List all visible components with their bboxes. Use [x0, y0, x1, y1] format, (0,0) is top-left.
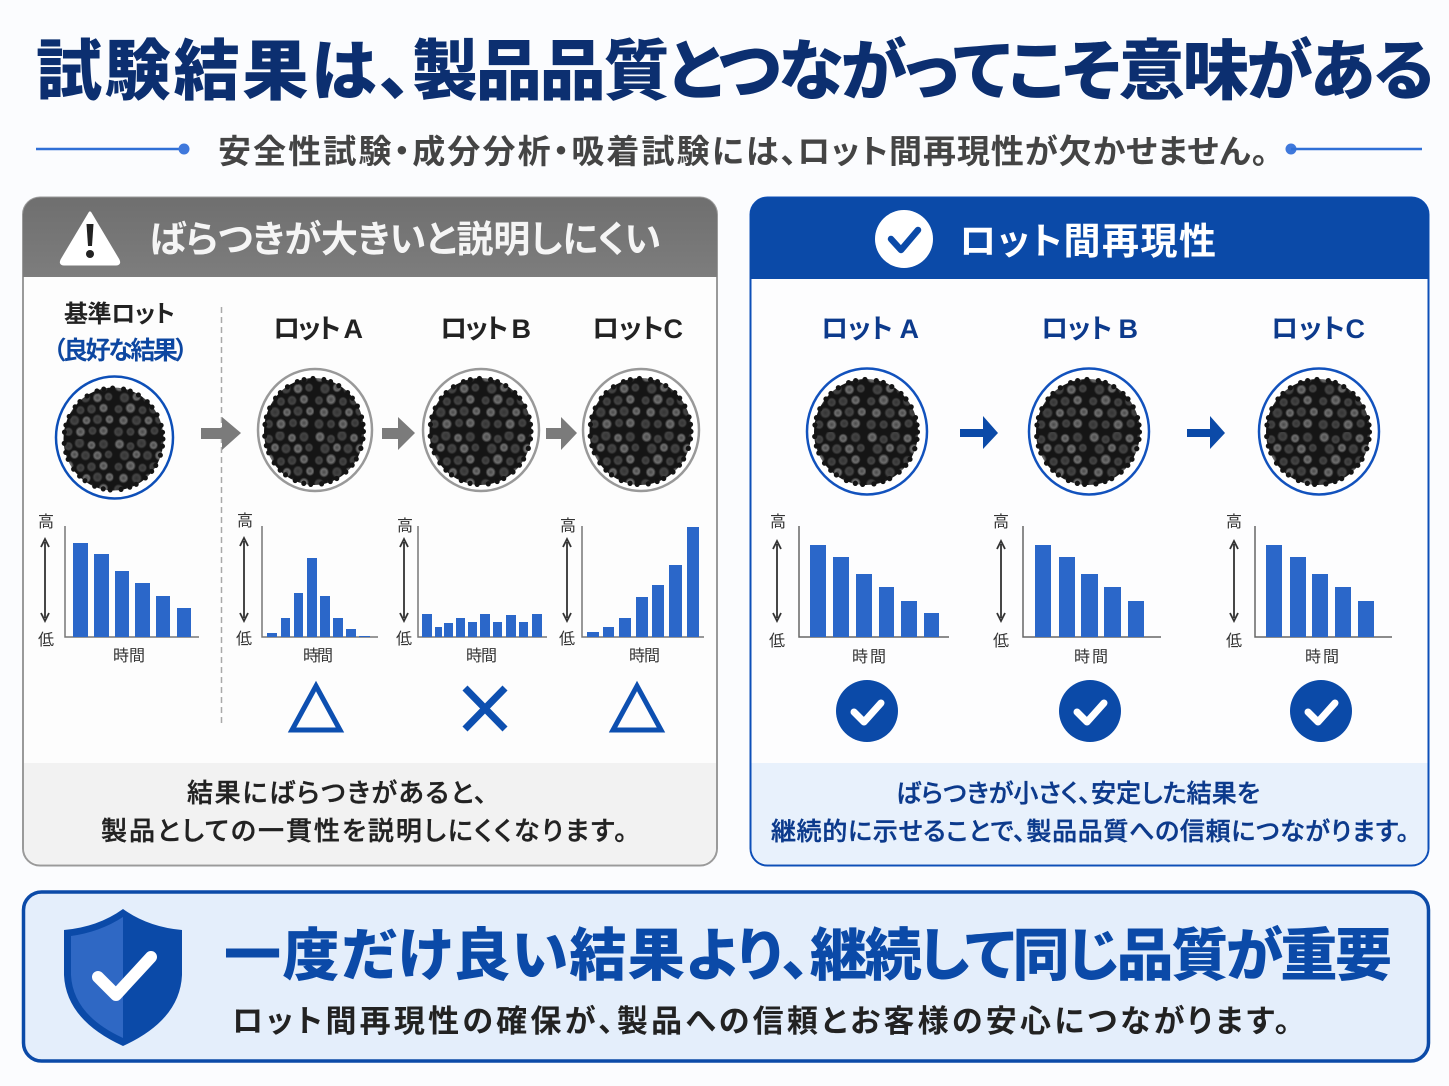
bar chart: lot A: 高: [237, 512, 253, 530]
verdict: check: [1290, 680, 1352, 742]
reference lot column: [38, 301, 199, 665]
panel heading: ロット間再現性: [959, 221, 1216, 262]
bar chart: reference: 時間: [113, 647, 145, 665]
bar chart: lot B: 高: [397, 517, 413, 535]
banner heading: [224, 924, 1392, 988]
bar chart: lot C: 時間: [629, 647, 660, 665]
sample dish: [583, 369, 699, 491]
sample dish: [1259, 368, 1379, 494]
icon: shield with check: [64, 909, 182, 1046]
bar chart: lot A: 低: [769, 632, 785, 650]
verdict: check: [836, 680, 898, 742]
bar chart: lot C: 時間: [1305, 648, 1339, 666]
bar chart: lot A: 低: [236, 630, 252, 648]
lot label: ロット A: [821, 314, 919, 344]
panel: large variation: [23, 198, 717, 866]
lot A column: [236, 314, 378, 730]
verdict: cross: [465, 688, 505, 729]
panel footer: blue: ばらつきが小さく、安定した結果を: [896, 780, 1260, 808]
panel header: gray: [23, 198, 717, 277]
bar chart: lot B: 高: [993, 513, 1009, 531]
panel footer: gray: [24, 763, 716, 864]
arrow: [960, 416, 998, 449]
bar chart: lot C: 高: [560, 517, 576, 535]
bar chart: reference: [38, 513, 199, 665]
lot C column: [1226, 314, 1392, 742]
sample dish: [1029, 368, 1149, 494]
arrow: [546, 417, 577, 450]
lot C column: [559, 314, 704, 730]
bar chart: reference: 低: [38, 631, 54, 649]
bar chart: lot B: 時間: [466, 647, 497, 665]
arrow: [1187, 416, 1225, 449]
banner text: ロット間再現性の確保が、製品への信頼とお客様の安心につながります。: [232, 1004, 1290, 1039]
verdict: check: [1059, 680, 1121, 742]
bar chart: lot A: 時間: [852, 648, 886, 666]
panel: lot reproducibility: [750, 198, 1429, 866]
arrow: [382, 417, 415, 450]
bar chart: reference: 高: [38, 513, 54, 531]
bar chart: lot C: [1226, 513, 1392, 666]
panel heading: ばらつきが大きいと説明しにくい: [149, 219, 661, 260]
bar chart: lot A: [769, 513, 949, 666]
bar chart: lot B: 低: [396, 630, 412, 648]
lot label: ロット B: [1041, 314, 1138, 344]
banner heading: 継続して同じ品質が重要: [810, 924, 1392, 988]
icon: warning triangle: [61, 213, 119, 264]
bar chart: lot C: [559, 517, 704, 665]
panel footer: gray: 結果にばらつきがあると、: [187, 778, 487, 808]
lot label: ロットC: [592, 314, 683, 344]
title: 試験結果は、: [36, 34, 412, 108]
lot B column: [993, 314, 1161, 742]
panel footer: blue: [752, 763, 1428, 864]
sample dish: [258, 369, 372, 491]
subtitle with rules: [36, 133, 1422, 170]
icon: check circle: [875, 210, 933, 268]
bar chart: lot B: 時間: [1074, 648, 1108, 666]
title: 製品品質とつながってこそ意味がある: [412, 34, 1434, 108]
bar chart: lot C: 高: [1226, 513, 1242, 531]
panel header: blue: [750, 198, 1429, 279]
banner heading: 一度だけ良い結果より、: [224, 924, 810, 988]
bar chart: lot B: [396, 517, 547, 665]
banner: conclusion: [24, 892, 1428, 1061]
sample dish: [807, 368, 927, 494]
lot B column: [396, 314, 547, 729]
lot label: ロット A: [273, 314, 363, 344]
bar chart: lot A: [236, 512, 378, 665]
lot label: ロットC: [1271, 314, 1365, 344]
lot label: ロット B: [440, 314, 531, 344]
bar chart: lot B: 低: [993, 632, 1009, 650]
lot label: 基準ロット: [64, 301, 175, 328]
subtitle with rules: 安全性試験・成分分析・吸着試験には、: [218, 133, 797, 170]
divider: [220, 307, 222, 725]
bar chart: lot C: 低: [559, 630, 575, 648]
sample dish: [56, 376, 173, 498]
sample dish: [423, 369, 539, 491]
bar chart: lot B: [993, 513, 1161, 666]
bar chart: lot A: 時間: [303, 647, 333, 665]
arrow: [201, 417, 241, 450]
bar chart: lot C: 低: [1226, 632, 1242, 650]
subtitle with rules: ロット間再現性が欠かせません。: [797, 133, 1268, 170]
panel footer: gray: 製品としての一貫性を説明しにくくなります。: [101, 816, 627, 846]
note: （良好な結果）: [53, 337, 188, 365]
verdict: triangle: [613, 686, 661, 730]
lot A column: [769, 314, 949, 742]
panel footer: blue: 継続的に示せることで、製品品質への信頼につながります。: [771, 818, 1409, 846]
verdict: triangle: [292, 686, 340, 730]
bar chart: lot A: 高: [770, 513, 786, 531]
